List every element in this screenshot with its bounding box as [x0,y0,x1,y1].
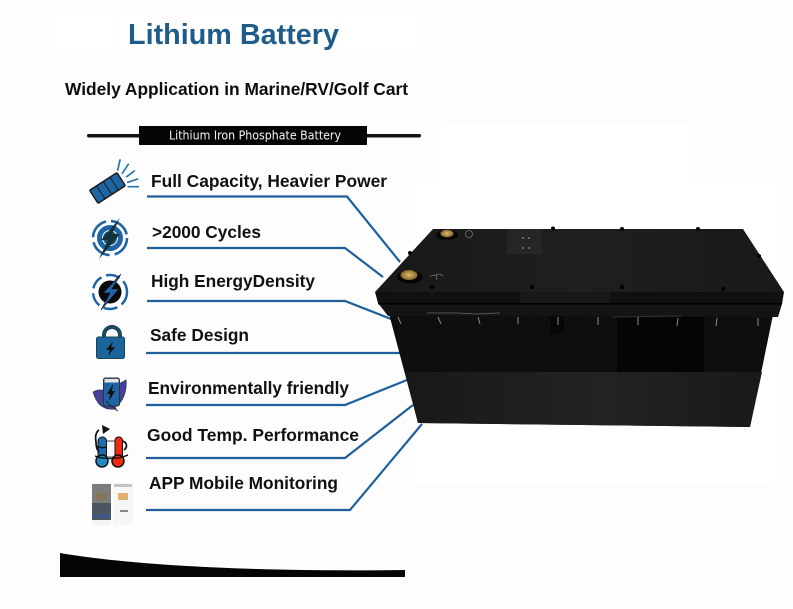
feature labels: Good Temp. Performance [147,425,359,445]
clips [398,317,758,326]
feature labels [147,171,387,493]
leader lines [146,196,422,510]
feature labels: Full Capacity, Heavier Power [151,171,387,191]
subtitle: Widely Application in Marine/RV/Golf Cart [65,79,408,99]
terminal marks [430,230,472,280]
banner: Lithium Iron Phosphate Battery [87,126,421,145]
icon: energy density [93,274,127,310]
feature labels: Safe Design [150,325,249,345]
title: Lithium Battery [128,19,339,51]
feature labels: >2000 Cycles [152,222,261,242]
black swoosh [60,553,405,577]
icon: leaf battery [93,378,126,411]
feature labels: APP Mobile Monitoring [149,473,338,493]
feature labels: High EnergyDensity [151,271,315,291]
icon: mobile app [92,483,133,525]
white backing behind battery [55,10,775,484]
screws [408,226,761,291]
battery photo [375,226,784,427]
terminals [436,230,458,240]
battery lid [375,229,784,292]
battery body [388,310,774,427]
icon: lock [96,327,124,358]
feature labels: Environmentally friendly [148,378,349,398]
icon: cycles [93,218,127,259]
banner: Lithium Iron Phosphate Battery: Lithium Iron Phosphate Battery [169,128,341,142]
icon: temperature [95,425,128,467]
icon: battery [89,160,138,204]
control panel [507,229,542,254]
